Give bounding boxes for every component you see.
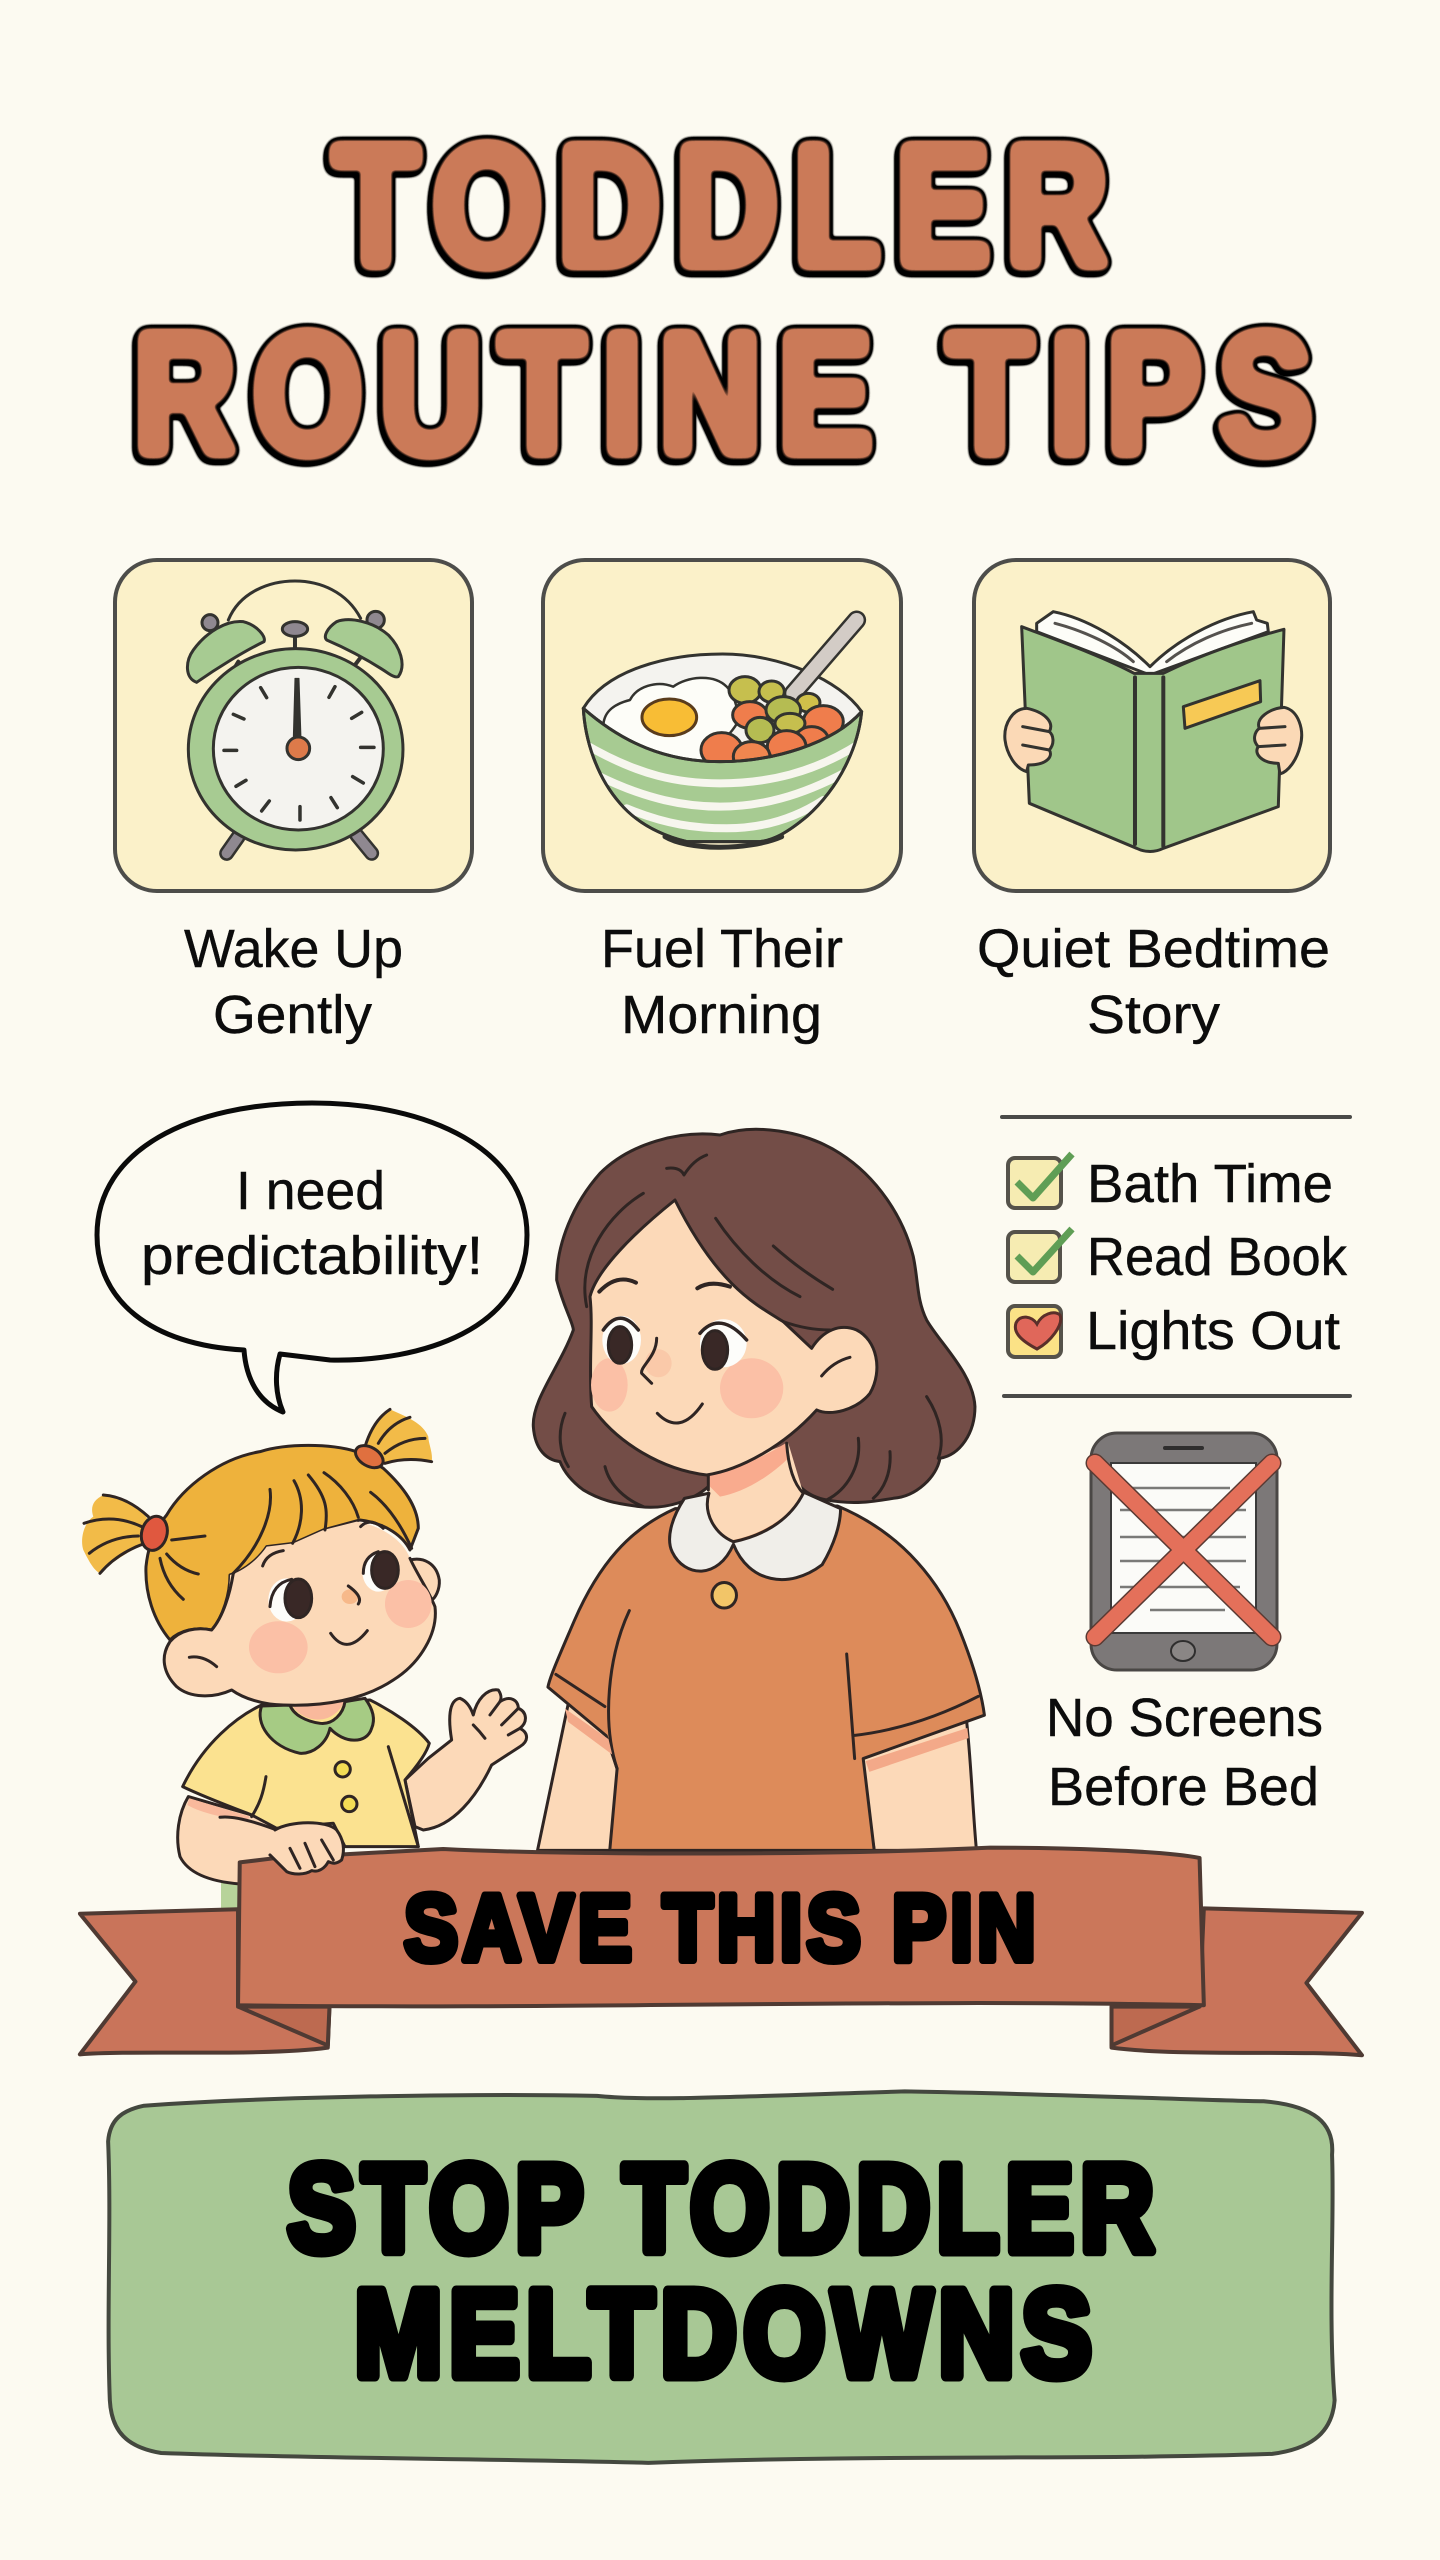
- icon: alarm clock: [187, 581, 403, 853]
- checkbox: lights out: [1008, 1306, 1061, 1357]
- speech bubble: predictability!: [141, 1226, 483, 1286]
- toddler's eyes: [268, 1552, 398, 1622]
- label: [184, 919, 403, 1045]
- item: lights out: Lights Out: [1086, 1301, 1340, 1361]
- mother's button: [712, 1583, 736, 1608]
- mother's neck: [708, 1443, 803, 1540]
- toddler's right pigtail: [352, 1409, 432, 1472]
- shirt creases: [252, 1747, 418, 1847]
- headline panel: [108, 2091, 1335, 2463]
- mother's collar: [670, 1492, 841, 1608]
- panel: fuel their morning: [543, 560, 901, 1045]
- banner: [80, 1848, 1362, 2055]
- item: read book: Read Book: [1087, 1227, 1348, 1287]
- label: Wake Up: [184, 919, 403, 979]
- toddler's features: [263, 1522, 383, 1644]
- title: TODDLER: [333, 108, 1124, 302]
- no screens caption: No Screens: [1046, 1688, 1323, 1748]
- item: bath time: Bath Time: [1087, 1154, 1333, 1214]
- checkbox: bath time: [1008, 1154, 1072, 1208]
- banner left tail: [80, 1909, 329, 2054]
- mother's face and ear: [590, 1200, 877, 1475]
- toddler's hair: [146, 1445, 418, 1640]
- label: Fuel Their: [601, 919, 843, 979]
- label: [977, 919, 1330, 1045]
- label: Morning: [621, 985, 822, 1045]
- toddler's right ear: [410, 1559, 439, 1600]
- toddler's collar: [260, 1698, 373, 1753]
- label: [601, 919, 843, 1045]
- bubble shape: [97, 1103, 527, 1412]
- toddler's left pigtail: [82, 1495, 171, 1573]
- toddler's face: [164, 1522, 435, 1705]
- toddler's lower arm: [178, 1797, 303, 1884]
- mother's eyes: [602, 1316, 747, 1369]
- title: [134, 108, 1330, 490]
- hair strands: [560, 1155, 941, 1507]
- card: [974, 560, 1330, 891]
- toddler's buttons: [335, 1762, 357, 1812]
- headline text: [288, 2140, 1160, 2403]
- arm crease: [220, 1817, 277, 1830]
- toddler's neck: [290, 1700, 345, 1720]
- no screens caption: Before Bed: [1048, 1757, 1319, 1817]
- illustration: toddler: [82, 1409, 527, 1915]
- toddler's cheeks: [249, 1580, 432, 1673]
- mother's head: [560, 1155, 941, 1540]
- panel background: [108, 2091, 1335, 2463]
- mother's body: [538, 1506, 984, 1850]
- panel: wake up gently: [115, 560, 472, 1045]
- checklist: [1008, 1154, 1348, 1361]
- fringe strands: [160, 1473, 412, 1599]
- no screens caption: [1046, 1688, 1323, 1817]
- toddler's shirt: [183, 1700, 429, 1847]
- toddler's pale green skirt: [221, 1875, 239, 1915]
- mother's hair: [533, 1129, 975, 1507]
- label: Gently: [213, 985, 372, 1045]
- card: [543, 560, 901, 891]
- mother's features: [599, 1280, 730, 1292]
- label: Story: [1087, 985, 1220, 1045]
- raised hand creases: [473, 1702, 520, 1738]
- illustration: mother: [533, 1129, 984, 1850]
- banner text: SAVE THIS PIN: [404, 1875, 1040, 1980]
- label: Quiet Bedtime: [977, 919, 1330, 979]
- icon: crossed-out tablet: [1091, 1433, 1277, 1670]
- bubble text: I need: [236, 1161, 385, 1221]
- face outline: [164, 1558, 435, 1705]
- checkbox: read book: [1008, 1229, 1072, 1282]
- banner right tail: [1112, 1908, 1362, 2055]
- sleeve shadow: [187, 1798, 250, 1821]
- mother's cheeks: [591, 1349, 783, 1418]
- toddler's hand on banner: [270, 1823, 343, 1874]
- panel: quiet bedtime story: [974, 560, 1330, 1045]
- card: [115, 560, 472, 891]
- icon: breakfast bowl: [583, 620, 862, 847]
- banner centre: [238, 1848, 1204, 2006]
- speech bubble: [97, 1103, 527, 1412]
- icon: open book: [1005, 612, 1302, 851]
- headline text: STOP TODDLER: [288, 2140, 1160, 2278]
- toddler's raised arm and hand: [405, 1690, 527, 1830]
- headline text: MELTDOWNS: [354, 2265, 1098, 2403]
- banner folds: [238, 2007, 1200, 2045]
